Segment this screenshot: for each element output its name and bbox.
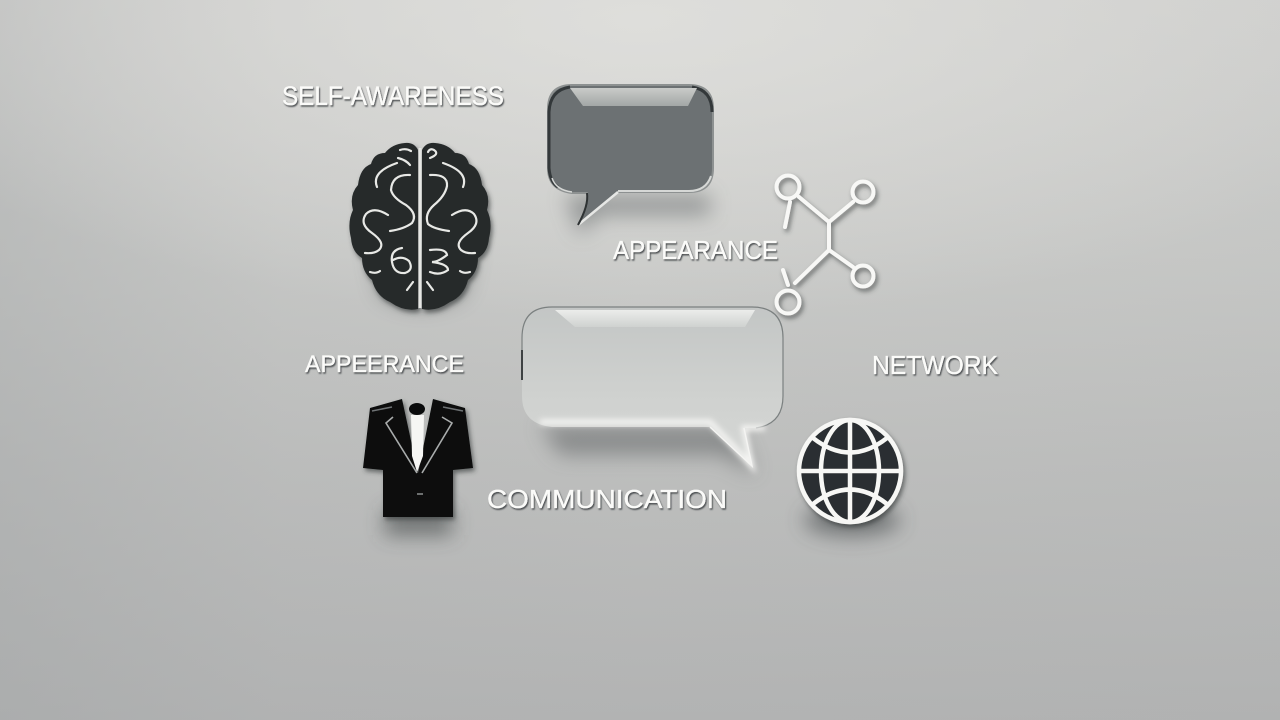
speech bubble: clear glass: [522, 307, 783, 475]
label: network: NETWORK: [872, 350, 999, 380]
label: communication: COMMUNICATION: [487, 484, 727, 514]
icon: suit jacket: [363, 399, 473, 535]
icon: globe: [799, 420, 901, 536]
label: appearance (centre): APPEARANCE: [613, 235, 778, 265]
label: self-awareness: SELF-AWARENESS: [282, 81, 504, 111]
icon: network: [776, 176, 874, 314]
label: appeerance (left): APPEERANCE: [305, 351, 464, 378]
speech bubble: dark glass: [548, 85, 713, 235]
icon: brain: [349, 143, 491, 310]
